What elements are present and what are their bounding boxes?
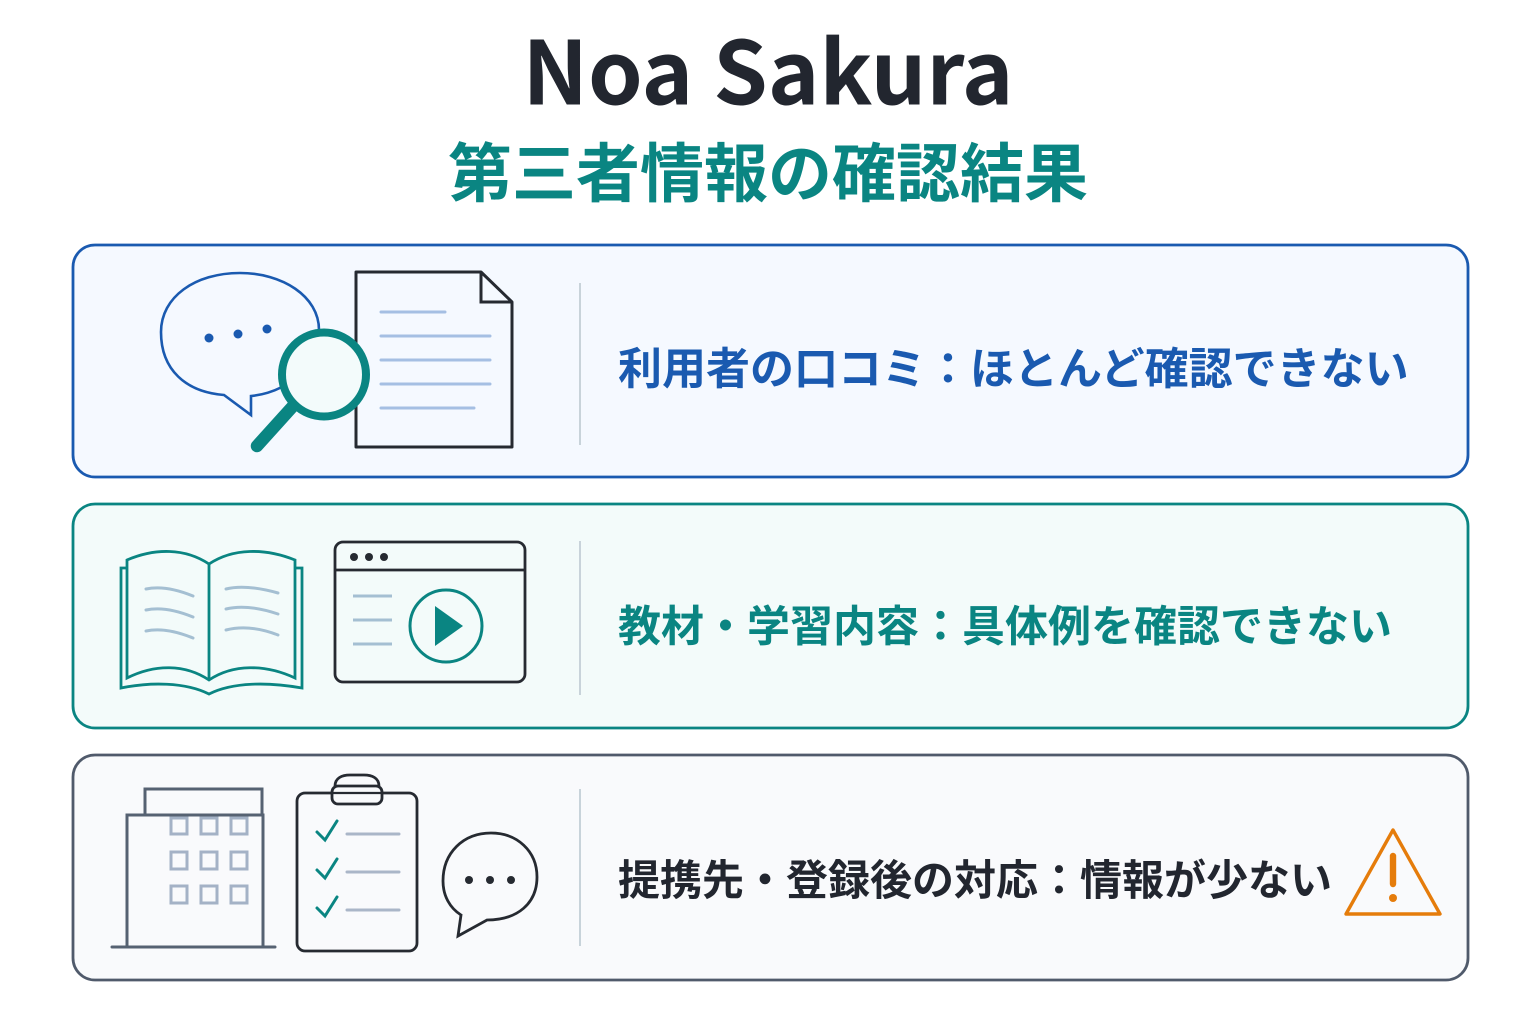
subtitle: 第三者情報の確認結果 [448,124,1088,216]
panel: course content [73,504,1468,728]
icon: building [112,789,275,947]
icon: video window [335,542,525,682]
icon: open book [121,551,302,694]
label: reviews: 利用者の口コミ：ほとんど確認できない [618,333,1409,397]
panel: company info [73,755,1468,980]
icon: speech bubble [161,273,319,415]
title: Noa Sakura [522,4,1014,130]
icon: magnifier [257,332,366,446]
icon: checklist clipboard [297,775,417,951]
icon: document [356,272,512,447]
label: course content: 教材・学習内容：具体例を確認できない [618,592,1392,654]
icon: small speech bubble [443,833,537,936]
label: company info: 提携先・登録後の対応：情報が少ない [618,847,1332,908]
icon: warning triangle [1346,830,1440,914]
panel: reviews [73,245,1468,477]
